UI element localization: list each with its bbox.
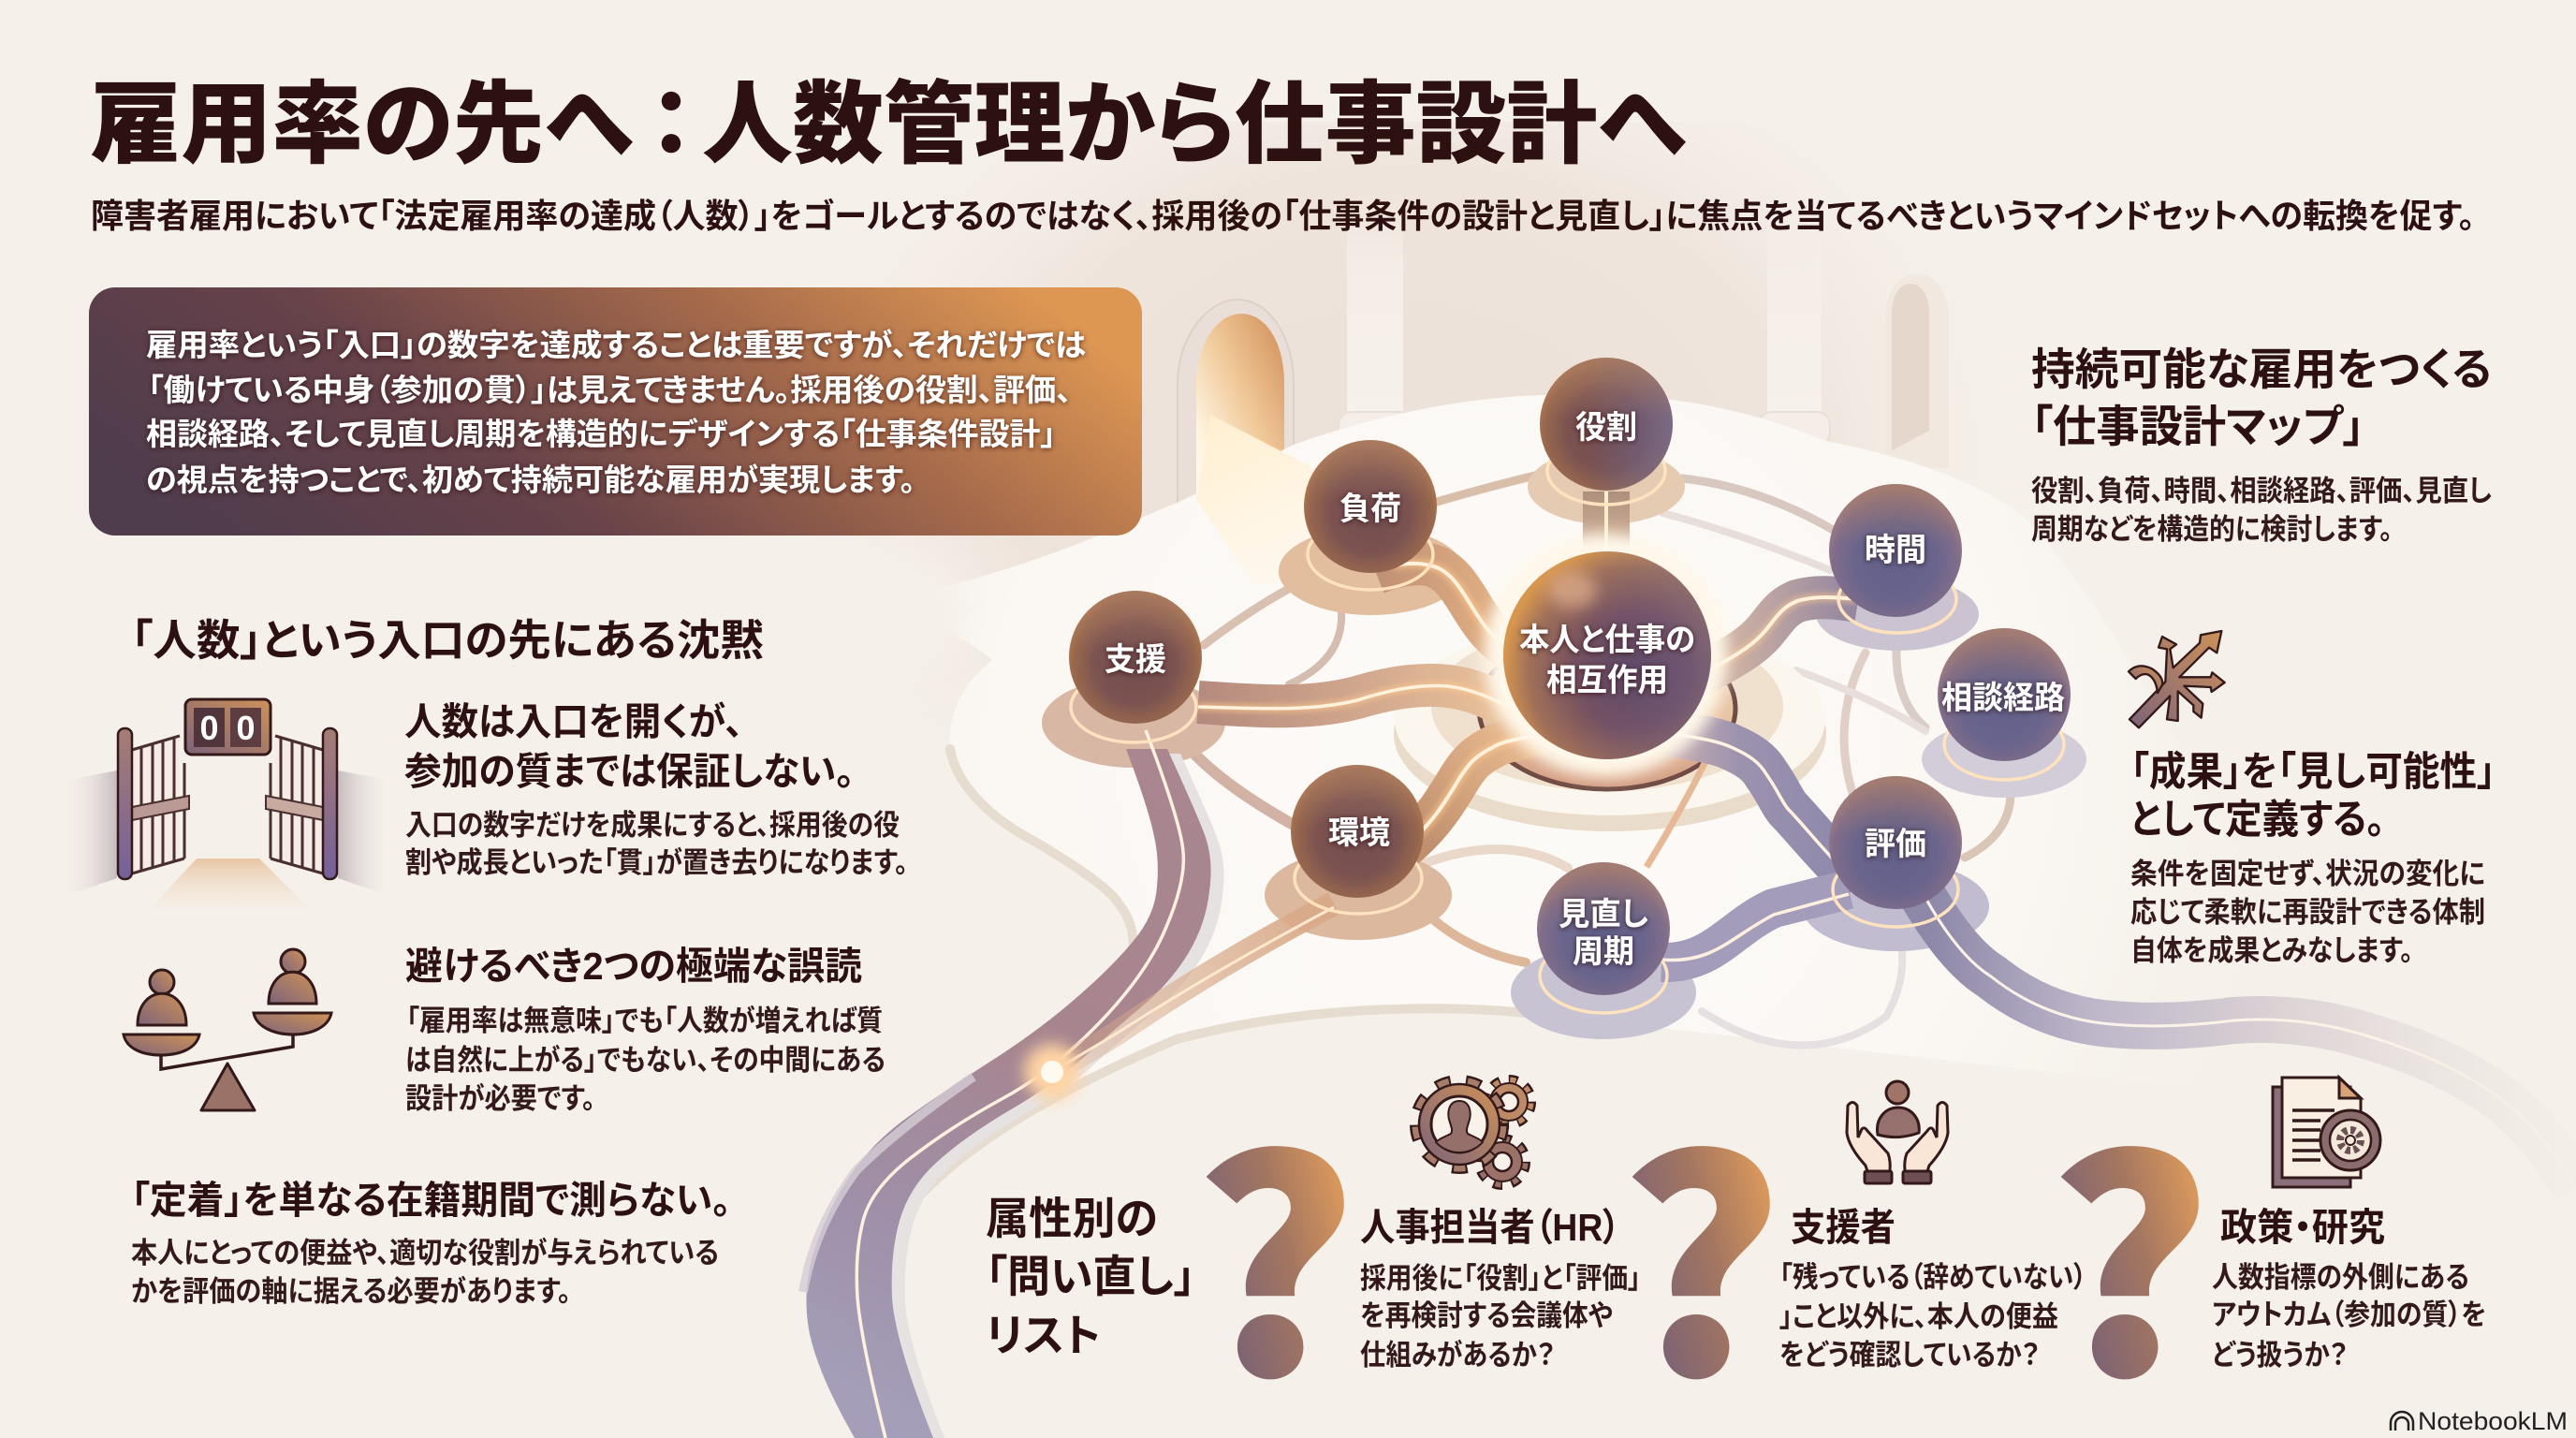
left column xyxy=(1339,187,1412,444)
icon: open gate with counter: 0 xyxy=(236,709,256,747)
block: two misreadings: 避けるべき2つの極端な誤読 xyxy=(405,945,862,988)
node: evaluation: 評価 xyxy=(1865,827,1926,862)
node: support: 支援 xyxy=(1105,642,1166,678)
node: consultation route xyxy=(1938,628,2071,761)
block: HR: 人事担当者（HR） xyxy=(1360,1206,1620,1249)
floor edges xyxy=(890,749,1526,1232)
node: load xyxy=(1304,440,1437,573)
back wall with columns and arches xyxy=(749,122,2153,796)
block: supporter: 」こと以外に、本人の便益 xyxy=(1779,1300,2058,1333)
block: supporter: 支援者 xyxy=(1791,1206,1895,1249)
node: environment xyxy=(1291,765,1424,898)
block: sustainable employment map xyxy=(2031,345,2492,546)
node: time: 時間 xyxy=(1865,533,1926,568)
subtitle: 障害者雇用において「法定雇用率の達成（人数）」をゴールとするのではなく、採用後の「仕事条件の設計と見直し」に焦点を当てるべきというマインドセットへの転換を促す。 xyxy=(91,197,2475,235)
block: policy and research: 人数指標の外側にある xyxy=(2212,1261,2469,1294)
node: review cycle: 周期 xyxy=(1573,934,1634,970)
icon: hands supporting person xyxy=(1847,1081,1948,1183)
block: supporter: 「残っている（辞めていない） xyxy=(1779,1261,2086,1294)
right arch xyxy=(1885,274,1949,468)
callout text: の視点を持つことで、初めて持続可能な雇用が実現します。 xyxy=(146,462,915,497)
heading: re-questioning list: 属性別の xyxy=(986,1194,1158,1243)
block: define outcome as reviewability: 応じて柔軟に再設計できる体制 xyxy=(2130,896,2485,929)
platforms under nodes xyxy=(1042,449,2086,1039)
glow rings xyxy=(1071,437,2064,1013)
node: role xyxy=(1540,358,1673,491)
tube to environment xyxy=(1404,733,1540,847)
block: two misreadings xyxy=(405,945,886,1115)
block: HR: を再検討する会議体や xyxy=(1360,1299,1613,1332)
block: headcount opens entry xyxy=(404,700,908,879)
centre halo xyxy=(1484,534,1727,777)
block: define outcome as reviewability: 自体を成果とみなします。 xyxy=(2130,934,2413,967)
block: supporter xyxy=(1779,1206,2086,1372)
icon: open gate with counter xyxy=(66,699,389,915)
block: headcount opens entry: 割や成長といった「貫」が置き去りになります。 xyxy=(405,846,908,879)
callout text: 「働けている中身（参加の貫）」は見えてきません。採用後の役割、評価、 xyxy=(148,373,1072,407)
block: retention: 「定着」を単なる在籍期間で測らない。 xyxy=(131,1179,731,1222)
block: policy and research xyxy=(2212,1206,2486,1372)
block: HR xyxy=(1360,1206,1641,1372)
block: sustainable employment map: 役割、負荷、時間、相談経路、評価、見直し xyxy=(2031,475,2492,507)
node: environment: 環境 xyxy=(1328,815,1390,851)
soft fade at floor left corner xyxy=(744,543,969,683)
callout text: 相談経路、そして見直し周期を構造的にデザインする「仕事条件設計」 xyxy=(146,417,1056,451)
tube review to evaluation xyxy=(1661,889,1849,962)
node: load: 負荷 xyxy=(1339,492,1401,527)
title: 雇用率の先へ xyxy=(90,75,633,175)
tube to load xyxy=(1376,564,1521,655)
node: review cycle xyxy=(1537,862,1670,995)
road outer halo xyxy=(803,1077,973,1292)
central disc platform xyxy=(1394,623,1826,831)
block: headcount opens entry: 参加の質までは保証しない。 xyxy=(404,750,855,793)
heading: re-questioning list xyxy=(986,1194,1195,1360)
node: centre: 本人と仕事の xyxy=(1519,623,1695,658)
title xyxy=(90,75,1686,175)
title: ： xyxy=(649,75,694,175)
node: evaluation xyxy=(1829,776,1962,909)
block: sustainable employment map: 持続可能な雇用をつくる xyxy=(2031,345,2492,394)
block: sustainable employment map: 周期などを構造的に検討します。 xyxy=(2031,513,2393,546)
block: policy and research: アウトカム（参加の質）を xyxy=(2212,1299,2486,1331)
tube to support xyxy=(1198,685,1535,719)
left arch with light xyxy=(1178,300,1294,510)
glowing node on road xyxy=(1024,1044,1080,1100)
callout text xyxy=(146,328,1086,497)
block: retention: かを評価の軸に据える必要があります。 xyxy=(131,1275,571,1308)
icon: branching arrows xyxy=(2129,631,2225,727)
block: headcount opens entry: 入口の数字だけを成果にすると、採用後の役 xyxy=(405,809,900,842)
heading: re-questioning list: リスト xyxy=(986,1311,1101,1360)
thin orange line from centre to review xyxy=(1647,742,1715,867)
section heading: silence beyond headcount: 「人数」という入口の先にある沈黙 xyxy=(131,616,764,665)
block: policy and research: どう扱うか？ xyxy=(2212,1339,2348,1372)
block: define outcome as reviewability: 「成果」を「見し可能性」 xyxy=(2130,750,2496,795)
icon: balance scale xyxy=(124,949,331,1110)
icon: document with gear xyxy=(2273,1078,2380,1187)
block: define outcome as reviewability xyxy=(2130,750,2496,967)
block: headcount opens entry: 人数は入口を開くが、 xyxy=(404,700,743,743)
road from support node to bottom xyxy=(803,730,1224,1438)
node: centre xyxy=(1503,551,1711,759)
node: review cycle: 見直し xyxy=(1559,897,1648,932)
block: policy and research: 政策・研究 xyxy=(2220,1206,2385,1249)
block: two misreadings: 「雇用率は無意味」でも「人数が増えれば質 xyxy=(406,1005,883,1037)
block: HR: 仕組みがあるか？ xyxy=(1360,1339,1555,1372)
title: 人数管理から仕事設計へ xyxy=(702,75,1686,175)
thin connector curves xyxy=(1184,476,2011,1046)
node: consultation route: 相談経路 xyxy=(1941,681,2065,716)
node: support xyxy=(1069,591,1202,724)
tube to role xyxy=(1583,492,1630,562)
callout panel xyxy=(89,287,1142,536)
door light on floor xyxy=(1196,415,1357,585)
brand: NotebookLM: NotebookLM xyxy=(2418,1407,2568,1435)
block: define outcome as reviewability: 条件を固定せず、状況の変化に xyxy=(2130,858,2485,890)
icon: gears with person xyxy=(1416,1080,1530,1184)
exit road to the right xyxy=(1919,889,2576,1189)
block: HR: 採用後に「役割」と「評価」 xyxy=(1360,1262,1641,1295)
block: supporter: をどう確認しているか？ xyxy=(1779,1339,2040,1372)
tube to evaluation xyxy=(1671,733,1858,885)
node: centre: 相互作用 xyxy=(1546,663,1668,698)
tubes from centre to nodes xyxy=(1198,492,1858,962)
branch tube to glowing node xyxy=(1052,903,1334,1072)
callout text: 雇用率という「入口」の数字を達成することは重要ですが、それだけでは xyxy=(146,328,1086,362)
heading: re-questioning list: 「問い直し」 xyxy=(986,1252,1195,1301)
right column xyxy=(1759,187,1830,446)
block: define outcome as reviewability: として定義する。 xyxy=(2130,798,2385,843)
node: role: 役割 xyxy=(1575,410,1637,446)
icon: open gate with counter: 0 xyxy=(199,709,219,747)
block: retention: 本人にとっての便益や、適切な役割が与えられている xyxy=(131,1237,719,1269)
tube to time xyxy=(1699,597,1858,676)
road light line xyxy=(856,730,1183,1438)
block: two misreadings: は自然に上がる」でもない、その中間にある xyxy=(405,1044,886,1077)
block: sustainable employment map: 「仕事設計マップ」 xyxy=(2031,402,2364,451)
floor platform xyxy=(889,394,2340,1232)
block: retention xyxy=(131,1179,731,1308)
block: two misreadings: 設計が必要です。 xyxy=(405,1082,595,1115)
node: time xyxy=(1829,484,1962,617)
